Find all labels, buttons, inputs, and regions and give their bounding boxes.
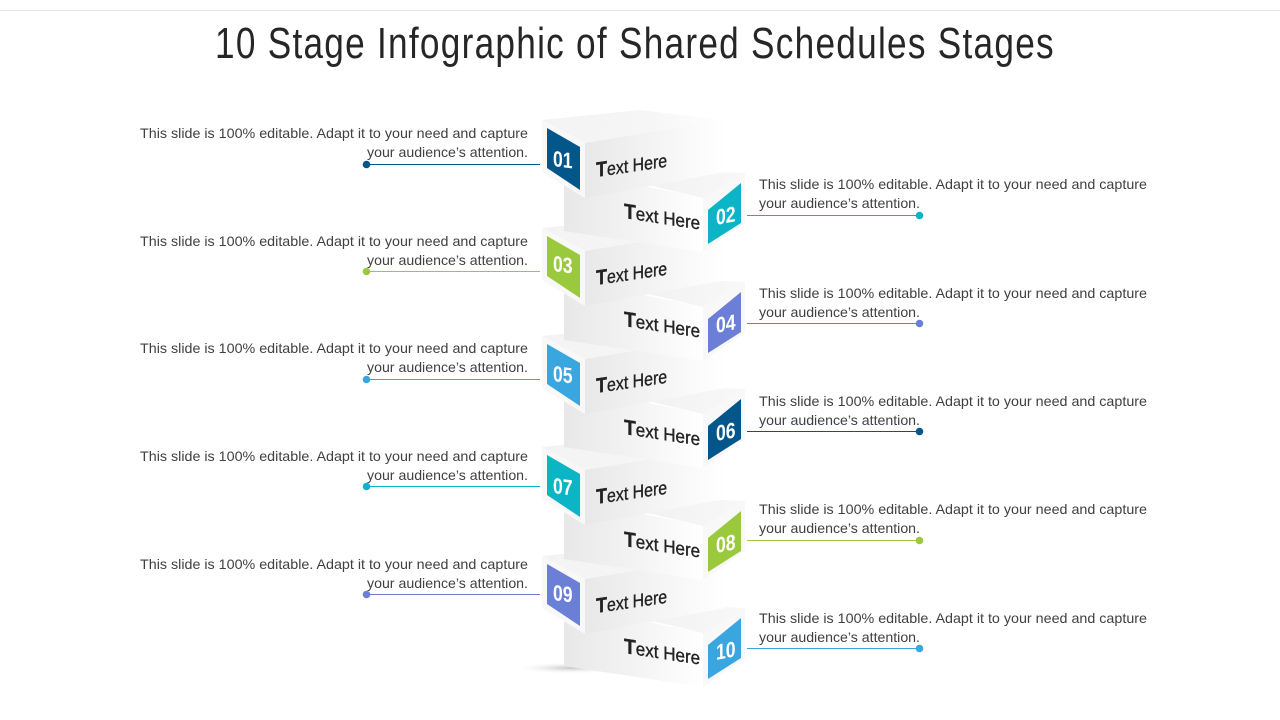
- stage 06 block: Text Here: [624, 416, 700, 451]
- top rule: [0, 10, 1280, 11]
- callout 06: [747, 393, 1147, 435]
- stage 06 block: 06: [716, 419, 736, 446]
- callout 08: [747, 501, 1147, 544]
- callout 03: This slide is 100% editable. Adapt it to your need and capture: [140, 233, 528, 249]
- callout 05: [140, 340, 540, 383]
- callout 02: your audience’s attention.: [759, 195, 920, 211]
- callout 10: This slide is 100% editable. Adapt it to your need and capture: [759, 610, 1147, 626]
- title: 10 Stage Infographic of Shared Schedules Stages: [215, 19, 1055, 68]
- stage 03 block: Text Here: [596, 257, 667, 290]
- callout 04: [747, 285, 1147, 327]
- stage 10 block: 10: [716, 638, 736, 665]
- stage 09 block: [542, 546, 725, 634]
- ground shadow: [512, 662, 628, 674]
- stage 02 block: Text Here: [624, 200, 700, 235]
- callout 09: your audience’s attention.: [367, 575, 528, 591]
- stage 03 block: 03: [553, 252, 573, 279]
- callout 05: your audience’s attention.: [367, 359, 528, 375]
- stage 05 block: [542, 326, 725, 414]
- stage 01 block: 01: [553, 147, 573, 174]
- callout 04: This slide is 100% editable. Adapt it to your need and capture: [759, 285, 1147, 301]
- stage 04 block: 04: [716, 311, 736, 338]
- callout 07: [140, 448, 540, 490]
- stage 05 block: Text Here: [596, 365, 667, 398]
- callout 02: [747, 176, 1147, 219]
- stage 10 block: [564, 605, 745, 687]
- callout 03: your audience’s attention.: [367, 252, 528, 268]
- stage 09 block: 09: [553, 581, 573, 608]
- callout 01: your audience’s attention.: [367, 144, 528, 160]
- callout 06: This slide is 100% editable. Adapt it to your need and capture: [759, 393, 1147, 409]
- stage 07 block: 07: [553, 474, 573, 501]
- stage 08 block: Text Here: [624, 528, 700, 563]
- callout 01: [140, 125, 540, 168]
- stage 01 block: Text Here: [596, 149, 667, 182]
- stage 05 block: 05: [553, 362, 573, 389]
- callout 08: This slide is 100% editable. Adapt it to your need and capture: [759, 501, 1147, 517]
- callout 01: This slide is 100% editable. Adapt it to your need and capture: [140, 125, 528, 141]
- stage 07 block: Text Here: [596, 476, 667, 509]
- stage 02 block: 02: [716, 203, 736, 230]
- stage 09 block: Text Here: [596, 585, 667, 618]
- callout 08: your audience’s attention.: [759, 520, 920, 536]
- stage 01 block: [542, 110, 725, 198]
- callout 05: This slide is 100% editable. Adapt it to your need and capture: [140, 340, 528, 356]
- callout 02: This slide is 100% editable. Adapt it to your need and capture: [759, 176, 1147, 192]
- callout 06: your audience’s attention.: [759, 412, 920, 428]
- stage 04 block: Text Here: [624, 308, 700, 343]
- stage 03 block: [542, 218, 725, 306]
- callout 10: [747, 610, 1147, 652]
- callout 04: your audience’s attention.: [759, 304, 920, 320]
- stage 08 block: 08: [716, 531, 736, 558]
- stage 06 block: [564, 386, 745, 468]
- callout 09: This slide is 100% editable. Adapt it to your need and capture: [140, 556, 528, 572]
- stage 08 block: [564, 498, 745, 580]
- callout 03: [140, 233, 540, 275]
- callout 09: [140, 556, 540, 598]
- stage 07 block: [542, 437, 725, 525]
- stage 10 block: Text Here: [624, 635, 700, 670]
- callout 10: your audience’s attention.: [759, 629, 920, 645]
- stage 04 block: [564, 279, 745, 361]
- stage 02 block: [564, 170, 745, 252]
- callout 07: This slide is 100% editable. Adapt it to your need and capture: [140, 448, 528, 464]
- callout 07: your audience’s attention.: [367, 467, 528, 483]
